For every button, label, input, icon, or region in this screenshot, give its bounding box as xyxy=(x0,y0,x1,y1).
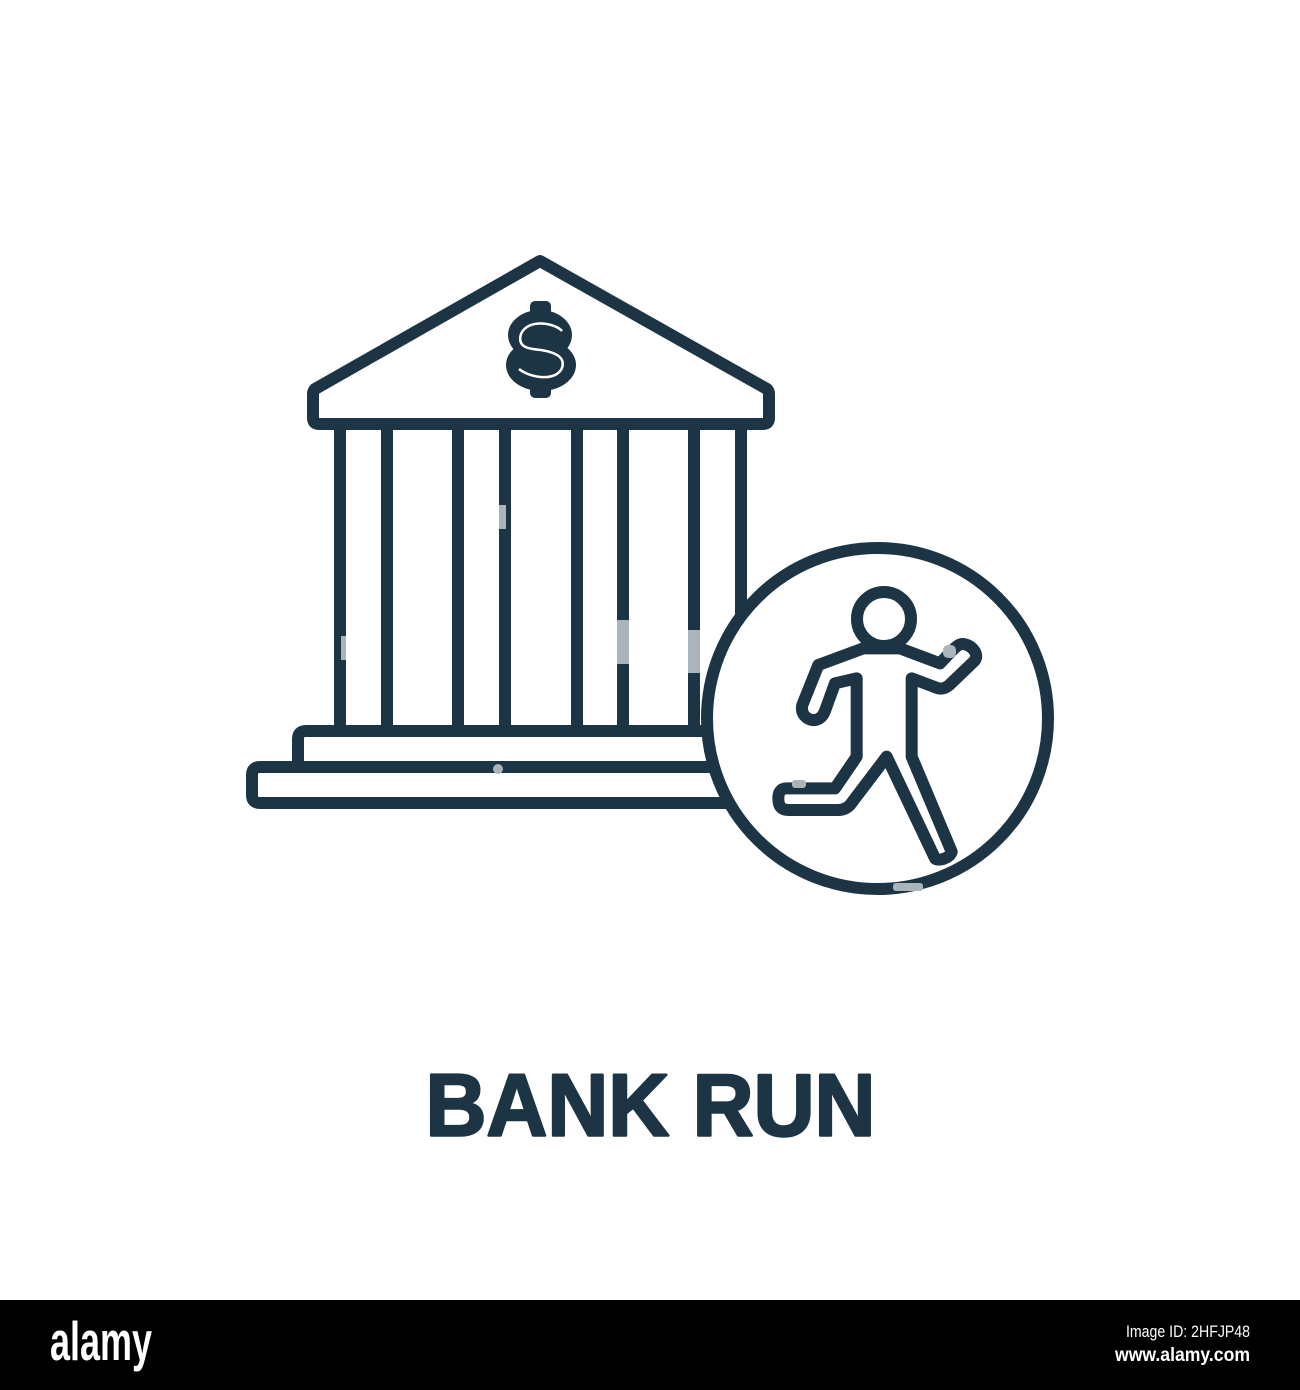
icon: dollar sign xyxy=(506,301,576,398)
alamy logo: alamy xyxy=(50,1310,152,1372)
circle badge xyxy=(707,548,1048,889)
title: BANK RUN xyxy=(426,1056,876,1154)
image id: Image ID: 2HFJP48 xyxy=(1126,1322,1250,1341)
bank upper step xyxy=(298,731,720,767)
runner body xyxy=(778,644,976,860)
icon: running person in circle xyxy=(493,548,1048,891)
bank roof pediment xyxy=(313,261,769,424)
watermark fragments xyxy=(493,645,956,891)
icon: bank building xyxy=(252,261,769,803)
footer bar xyxy=(0,1300,1300,1390)
runner head xyxy=(857,592,911,646)
website url: www.alamy.com xyxy=(1114,1345,1250,1366)
bank lower step xyxy=(252,767,740,803)
bank columns xyxy=(340,424,741,731)
